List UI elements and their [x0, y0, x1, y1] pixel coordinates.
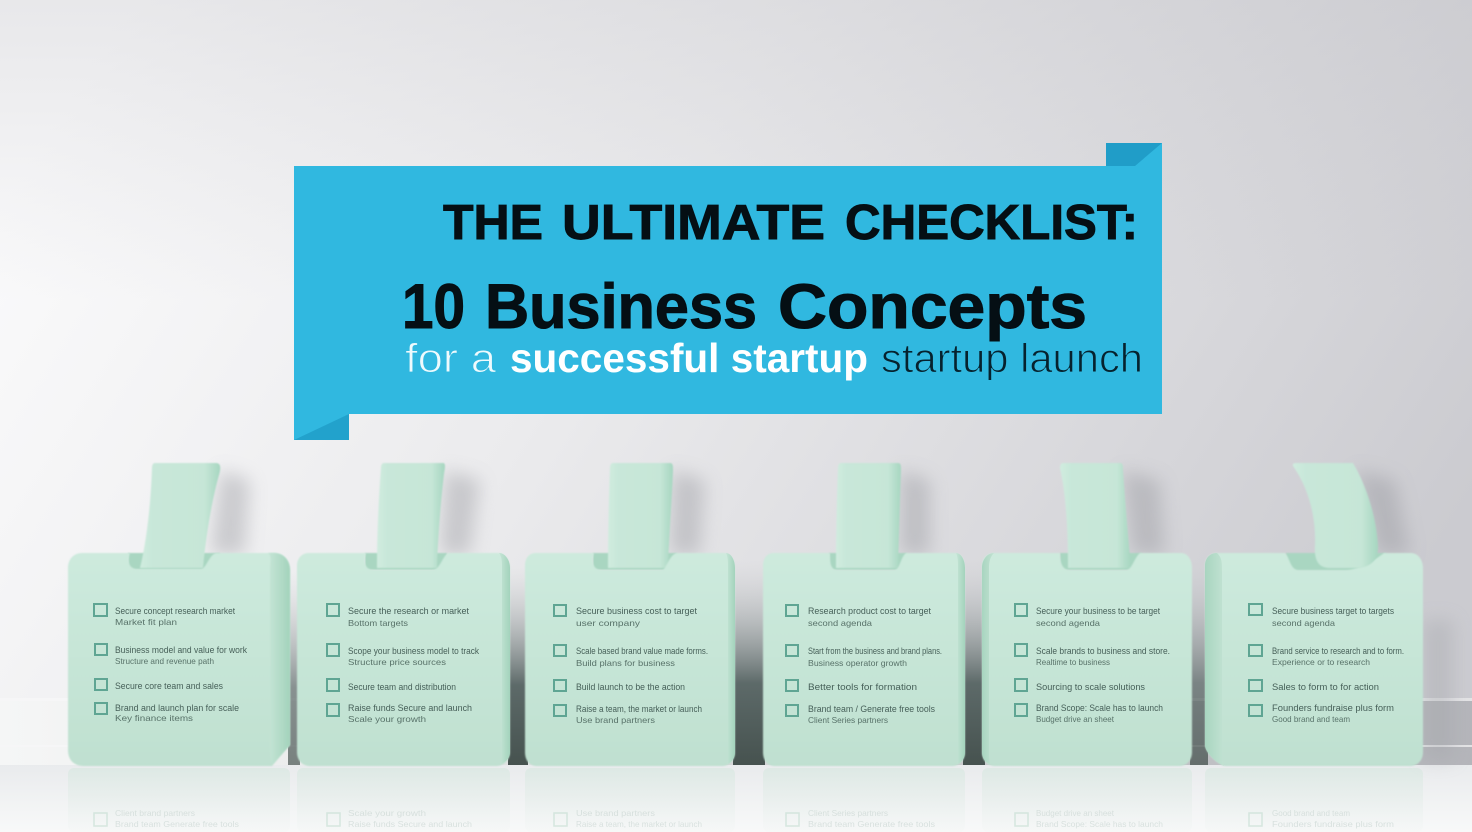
card 2 checklist: Bottom targets — [348, 618, 408, 628]
card 3 checklist: user company — [576, 618, 641, 628]
card 2 notch — [365, 553, 447, 570]
card 2 checklist: Structure price sources — [348, 657, 446, 667]
floor reflections of cards: Brand team Generate free tools — [808, 819, 935, 829]
banner body — [294, 166, 1162, 414]
title line 2: 10 — [402, 272, 465, 342]
card 6 checklist: Founders fundraise plus form — [1272, 703, 1394, 713]
reflective floor — [0, 765, 1472, 832]
card 4 strap — [836, 463, 901, 568]
wall shadows cast by straps — [210, 470, 1410, 555]
card 3 checklist: Build launch to be the action — [576, 682, 685, 692]
subtitle: for a — [405, 335, 496, 381]
card 1 checklist: Structure and revenue path — [115, 656, 214, 666]
card 6 checklist — [1249, 604, 1404, 724]
card 6 — [1205, 463, 1423, 766]
card 3 body — [525, 553, 735, 766]
card 1 checklist: Market fit plan — [115, 617, 177, 627]
card 4 checklist: Start from the business and brand plans. — [808, 646, 942, 656]
card 3 checklist: Build plans for business — [576, 658, 675, 668]
card 2 checklist: Raise funds Secure and launch — [348, 703, 472, 713]
card 4 checklist: Business operator growth — [808, 658, 907, 668]
card 6 strap — [1293, 463, 1378, 568]
card 2 body — [297, 553, 510, 766]
title line 1: ULTIMATE — [562, 196, 825, 250]
card 3 side face — [726, 553, 735, 764]
card 2 checklist — [327, 604, 479, 724]
card 1 body — [68, 553, 290, 766]
card 5 — [982, 463, 1192, 766]
card 4 side face — [956, 553, 965, 764]
card 6 checklist: Brand service to research and to form. — [1272, 646, 1404, 656]
card 2 checklist: Scale your growth — [348, 714, 426, 724]
card 4 checklist: Brand team / Generate free tools — [808, 704, 935, 714]
card 4 checklist: Better tools for formation — [808, 682, 917, 692]
title line 1: CHECKLIST: — [845, 196, 1138, 250]
floor reflections of cards: Founders fundraise plus form — [1272, 819, 1394, 829]
floor reflections of cards: Brand team Generate free tools — [115, 819, 239, 829]
card 5 strap — [1060, 463, 1131, 568]
card 3 checklist — [554, 605, 708, 725]
floor reflections of cards: Budget drive an sheet — [1036, 808, 1115, 818]
card 6 checklist: Experience or to research — [1272, 657, 1370, 667]
card 1 side face — [268, 553, 290, 764]
card 3 checklist: Use brand partners — [576, 715, 655, 725]
card 3 strap — [608, 463, 673, 568]
card 1 — [68, 463, 290, 766]
subtitle — [405, 335, 1143, 381]
floor reflections of cards: Client brand partners — [115, 808, 195, 818]
card 5 checklist: Realtime to business — [1036, 657, 1110, 667]
card 6 notch — [1286, 553, 1386, 571]
card 5 side face — [982, 553, 994, 764]
card 2 — [297, 463, 510, 766]
card 5 body — [982, 553, 1192, 766]
card 5 checklist: Budget drive an sheet — [1036, 714, 1115, 724]
title line 2: Business — [485, 272, 757, 342]
card 4 checklist: Research product cost to target — [808, 606, 931, 616]
card 1 checklist — [94, 604, 247, 723]
card 6 checklist: second agenda — [1272, 618, 1335, 628]
title line 1: THE — [443, 196, 543, 250]
card 6 body — [1205, 553, 1423, 766]
banner — [294, 143, 1162, 440]
subtitle: startup launch — [881, 335, 1143, 381]
card 3 checklist: Scale based brand value made forms. — [576, 646, 708, 656]
card 4 body — [763, 553, 965, 766]
card 4 notch — [829, 553, 907, 570]
floor reflections of cards: Use brand partners — [576, 808, 655, 818]
card 6 checklist: Secure business target to targets — [1272, 606, 1394, 616]
floor reflections of cards: Raise a team, the market or launch — [576, 819, 702, 829]
card 6 checklist: Good brand and team — [1272, 714, 1350, 724]
card 5 checklist: Scale brands to business and store. — [1036, 646, 1170, 656]
floor reflections of cards — [68, 768, 1423, 832]
card 1 checklist: Secure core team and sales — [115, 681, 223, 691]
baseboard — [0, 698, 1472, 765]
floor reflections of cards: Brand Scope: Scale has to launch — [1036, 819, 1163, 829]
card 2 checklist: Secure team and distribution — [348, 682, 456, 692]
card 2 side face — [499, 553, 510, 764]
card 1 checklist: Secure concept research market — [115, 606, 235, 616]
card 4 checklist — [786, 605, 942, 725]
banner fold: top right — [1106, 143, 1162, 167]
card 3 checklist: Raise a team, the market or launch — [576, 704, 702, 714]
card 5 notch — [1060, 553, 1142, 570]
card 1 notch — [128, 553, 220, 570]
card 4 — [763, 463, 965, 766]
card 5 checklist: Brand Scope: Scale has to launch — [1036, 703, 1163, 713]
title line 2: Concepts — [778, 272, 1087, 342]
card 2 checklist: Secure the research or market — [348, 606, 469, 616]
card 1 checklist: Business model and value for work — [115, 645, 247, 655]
card 2 strap — [377, 463, 445, 568]
banner fold: bottom left — [294, 412, 349, 440]
card 6 side face — [1205, 553, 1224, 766]
floor reflections of cards: Raise funds Secure and launch — [348, 819, 472, 829]
card 3 checklist: Secure business cost to target — [576, 606, 697, 616]
card 5 checklist: Secure your business to be target — [1036, 606, 1160, 616]
card 5 checklist — [1015, 604, 1170, 724]
shadows between blocks — [288, 560, 1453, 765]
card 3 notch — [593, 553, 677, 570]
subtitle: successful startup — [510, 335, 868, 381]
card 5 checklist: Sourcing to scale solutions — [1036, 682, 1146, 692]
title line 2 — [402, 272, 1087, 342]
title line 1 — [443, 196, 1138, 250]
floor reflections of cards: Good brand and team — [1272, 808, 1350, 818]
card 4 checklist: second agenda — [808, 618, 872, 628]
card 6 checklist: Sales to form to for action — [1272, 682, 1379, 692]
card 1 strap — [140, 463, 220, 568]
card 3 — [525, 463, 735, 766]
card 2 checklist: Scope your business model to track — [348, 646, 479, 656]
card 1 checklist: Key finance items — [115, 713, 193, 723]
card 4 checklist: Client Series partners — [808, 715, 888, 725]
floor reflections of cards: Scale your growth — [348, 808, 426, 818]
floor reflections of cards: Client Series partners — [808, 808, 888, 818]
card 1 checklist: Brand and launch plan for scale — [115, 703, 239, 713]
card 5 checklist: second agenda — [1036, 618, 1100, 628]
